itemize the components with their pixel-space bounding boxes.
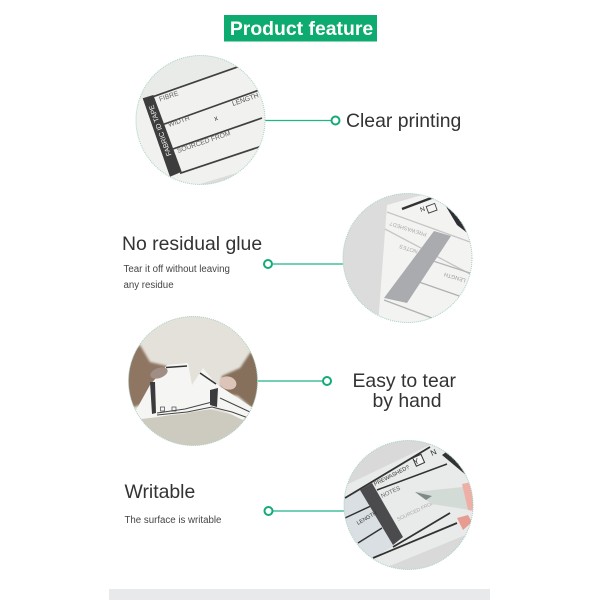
photo: peeled tape without residue: LENGTH [443, 271, 467, 283]
connector: no residual glue [264, 260, 346, 268]
connector: writable [264, 507, 346, 515]
heading: writable: Writable [124, 481, 195, 503]
connector: clear printing [262, 116, 340, 124]
footer band [109, 589, 490, 600]
panel: clear printing [130, 50, 461, 190]
description: no residual glue: any residue [124, 280, 174, 291]
description: no residual glue: Tear it off without leaving [124, 264, 230, 275]
photo: writing on tape with pen: SOURCED FROM [396, 500, 436, 523]
photo border [344, 440, 473, 570]
photo: peeled tape without residue [340, 190, 475, 325]
description: writable: The surface is writable [124, 515, 221, 526]
label: clear printing: Clear printing [346, 110, 461, 132]
label: easy to tear by hand: Easy to tear [352, 370, 457, 392]
photo: printed tape close-up: LENGTH [231, 92, 260, 108]
label: easy to tear by hand: by hand [372, 390, 442, 412]
connector: easy to tear [250, 377, 331, 385]
photo: printed tape close-up: x [213, 115, 219, 123]
photo: peeled tape without residue: NOTES [398, 242, 419, 254]
photo: writing on tape with pen: PREWASHED? [373, 465, 411, 488]
title: Product feature [230, 18, 373, 40]
photo: writing on tape with pen: N [429, 447, 438, 458]
photo: printed tape close-up: FABRIC ID TAPE [148, 103, 173, 157]
photo: printed tape close-up [136, 56, 265, 184]
photo: writing on tape with pen [344, 440, 473, 570]
photo border [128, 316, 258, 446]
photo: printed tape close-up: SOURCED FROM [176, 130, 232, 155]
heading: no residual glue: No residual glue [122, 233, 262, 255]
panel: no residual glue [122, 190, 475, 325]
photo: writing on tape with pen: LENGTH [356, 510, 378, 527]
photo: peeled tape without residue: N [419, 206, 426, 214]
photo border [343, 194, 472, 322]
photo border [136, 56, 265, 184]
panel: writable [124, 438, 480, 573]
panel: easy to tear [125, 315, 457, 450]
photo: printed tape close-up: WIDTH [167, 115, 191, 129]
photo: writing on tape with pen: Y [412, 456, 421, 467]
photo: writing on tape with pen: NOTES [380, 486, 402, 500]
photo: printed tape close-up: FIBRE [158, 90, 180, 103]
photo: hands tearing tape [128, 316, 258, 446]
photo: peeled tape without residue: PREWASHED? [389, 220, 428, 237]
